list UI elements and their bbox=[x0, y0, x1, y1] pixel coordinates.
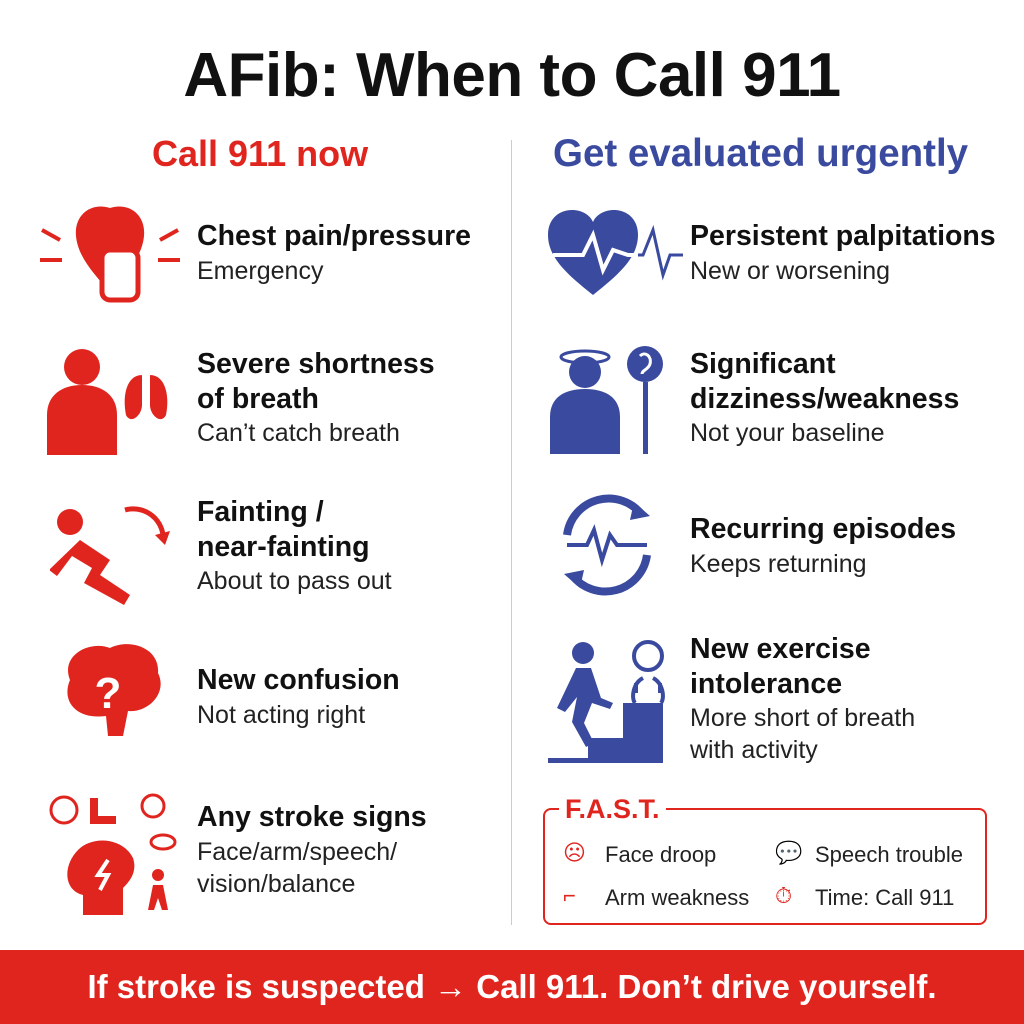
text: chest pain: Chest pain/pressure bbox=[197, 220, 471, 252]
fast items: Time: Call 911 bbox=[815, 885, 954, 910]
panel: left column: About to pass out bbox=[197, 567, 392, 595]
text: confusion: New confusion bbox=[197, 664, 400, 696]
footer banner: If stroke is suspected → Call 911. Don’t drive yourself. bbox=[87, 968, 937, 1005]
text: exercise bbox=[690, 633, 871, 700]
fast items: ☹ bbox=[563, 840, 586, 865]
text: exercise: intolerance bbox=[690, 668, 842, 700]
footer banner bbox=[0, 950, 1024, 1024]
fast items bbox=[563, 840, 963, 910]
fast items: ⌐ bbox=[563, 883, 576, 908]
panel: right column: New or worsening bbox=[690, 257, 890, 285]
panel: right column: Not your baseline bbox=[690, 419, 885, 447]
callout: FAST box bbox=[543, 808, 987, 925]
fast label: F.A.S.T. bbox=[565, 794, 660, 824]
text: dizziness bbox=[690, 348, 959, 415]
panel: left column bbox=[40, 206, 471, 915]
text: shortness of breath: of breath bbox=[197, 383, 319, 415]
icon: stroke signs bbox=[50, 794, 176, 915]
panel: left column: Face/arm/speech/ bbox=[197, 838, 397, 866]
text: dizziness: dizziness/weakness bbox=[690, 383, 959, 415]
icon: fainting bbox=[50, 506, 170, 605]
title: AFib: When to Call 911 bbox=[183, 41, 841, 110]
fast items: ⏱ bbox=[775, 883, 792, 908]
heading: call 911 now: Call 911 now bbox=[152, 133, 368, 174]
panel: right column: Keeps returning bbox=[690, 550, 867, 578]
icon: brain bbox=[67, 644, 161, 736]
icon: recurring bbox=[563, 494, 651, 596]
text: dizziness: Significant bbox=[690, 348, 836, 380]
text: recurring: Recurring episodes bbox=[690, 513, 956, 545]
panel: left column: vision/balance bbox=[197, 870, 355, 898]
fast items: Arm weakness bbox=[605, 885, 749, 910]
icon: exercise stairs bbox=[548, 640, 665, 763]
text: exercise: New exercise bbox=[690, 633, 871, 665]
fast items: 💬 bbox=[775, 840, 802, 865]
panel: right column bbox=[548, 210, 996, 764]
fast items: Speech trouble bbox=[815, 842, 963, 867]
panel: right column: More short of breath bbox=[690, 704, 915, 732]
panel: left column: Can’t catch breath bbox=[197, 419, 400, 447]
text: fainting: Fainting / bbox=[197, 496, 324, 528]
fast items: Face droop bbox=[605, 842, 716, 867]
icon: brain: ? bbox=[95, 669, 121, 718]
icon: shortness of breath bbox=[47, 349, 168, 455]
text: shortness of breath bbox=[197, 348, 435, 415]
text: fainting bbox=[197, 496, 370, 563]
panel: right column: with activity bbox=[690, 736, 818, 764]
panel: left column: Not acting right bbox=[197, 701, 365, 729]
icon: dizziness bbox=[550, 346, 663, 454]
icon: heart fist bbox=[40, 206, 180, 302]
panel: left column: Emergency bbox=[197, 257, 323, 285]
icon: heart ecg bbox=[548, 210, 683, 295]
text: palpitations: Persistent palpitations bbox=[690, 220, 996, 252]
text: fainting: near-fainting bbox=[197, 531, 370, 563]
text: shortness of breath: Severe shortness bbox=[197, 348, 435, 380]
text: stroke signs: Any stroke signs bbox=[197, 801, 427, 833]
heading: get evaluated urgently: Get evaluated urgently bbox=[553, 132, 968, 175]
